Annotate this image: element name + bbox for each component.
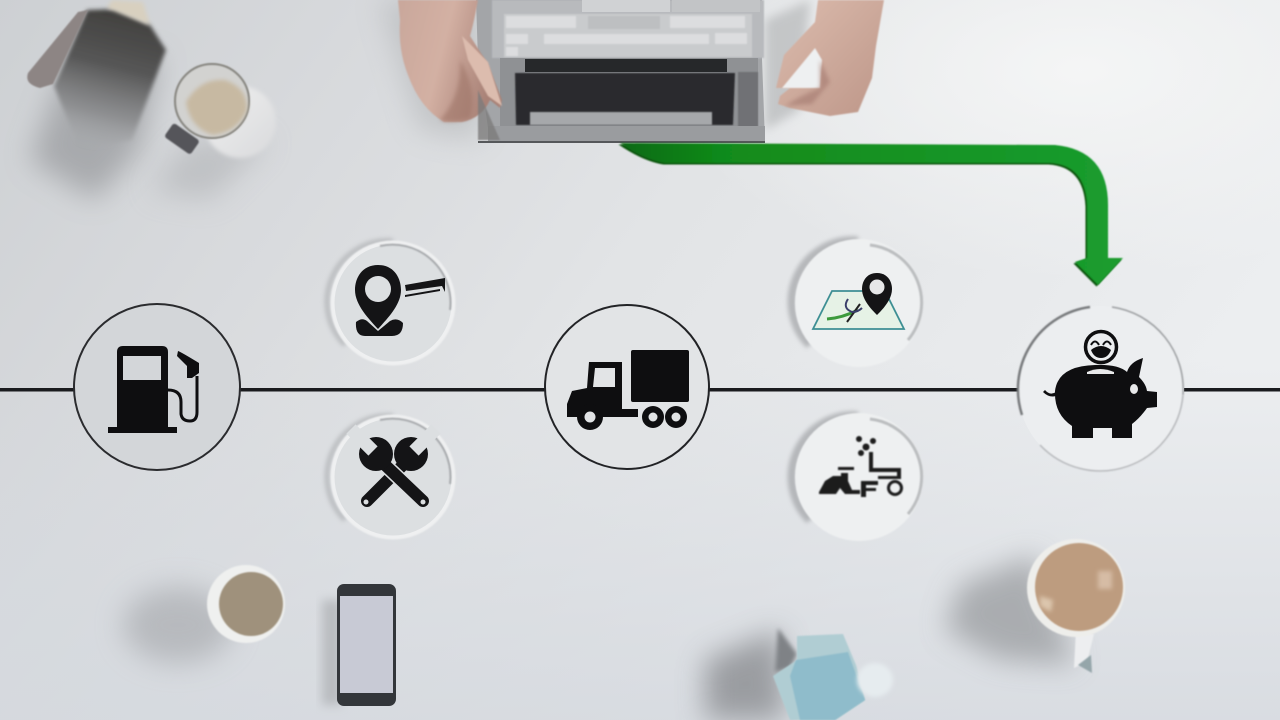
node: piggy bank [1018, 306, 1184, 472]
photo: mug top left [150, 63, 276, 200]
icon: vehicle route network [819, 436, 902, 497]
green arrow from laptop to piggy bank [618, 143, 1123, 286]
node: map with pin [792, 239, 923, 367]
node: wrench and screwdriver tools [327, 414, 456, 540]
photo: book with shadow [27, 0, 166, 200]
screen hinge and dark recess [500, 58, 758, 130]
laptop base [476, 0, 765, 141]
photo: smartphone [322, 584, 396, 706]
node: location pin [327, 240, 456, 366]
keyboard [504, 14, 752, 57]
photo: tea cup lower right [945, 539, 1125, 673]
icon: piggy bank with coin [1043, 332, 1157, 438]
photo: milk carton [705, 628, 893, 720]
timeline line [0, 388, 1280, 392]
photo: coffee cup lower left [123, 565, 285, 663]
node: truck [545, 305, 709, 469]
laptop shadow [380, 0, 480, 140]
right hand [776, 0, 884, 116]
left hand [398, 0, 502, 122]
icon: map with pin [813, 273, 904, 329]
node: vehicle route connection [792, 413, 923, 541]
icon: fuel pump [108, 346, 199, 433]
icon: crossed wrenches [351, 429, 436, 504]
icon: location pin with road [355, 265, 445, 336]
icon: truck [567, 350, 689, 430]
photo: hands and laptop [380, 0, 884, 143]
node: fuel pump [74, 304, 240, 470]
